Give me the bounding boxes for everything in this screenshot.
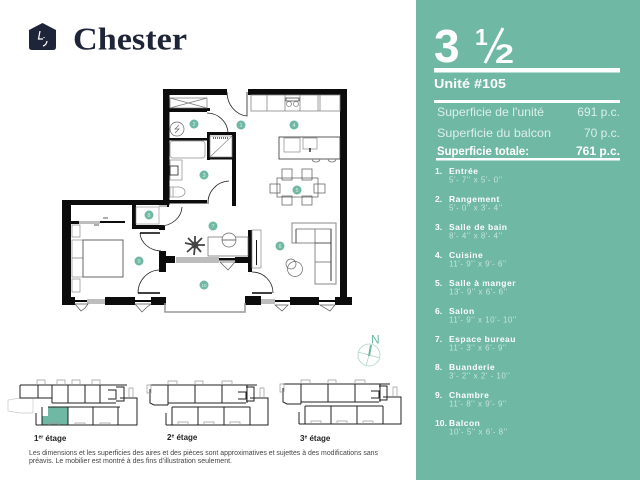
room item 8: 8. <box>435 362 442 372</box>
tall cabinet <box>252 230 261 268</box>
water heater <box>170 122 184 136</box>
room 3: 3 <box>202 173 206 179</box>
room item 8: 3'- 2'' x 2' - 10'' <box>449 372 510 380</box>
coffee tables <box>286 259 302 276</box>
building walls <box>20 385 137 425</box>
room item 8 <box>435 362 510 380</box>
walls <box>62 89 352 305</box>
building walls <box>283 384 401 424</box>
room item 6: Salon <box>449 306 475 316</box>
room item 10 <box>435 418 508 436</box>
room item 3: 8'- 4'' x 8'- 4'' <box>449 232 503 240</box>
room item 6: 6. <box>435 306 442 316</box>
room item 2: 5'- 0'' x 3'- 4'' <box>449 204 503 212</box>
kitchen island <box>279 137 340 162</box>
windows and sliding doors <box>79 205 275 304</box>
bathroom sink <box>170 160 182 180</box>
room item 9: 11'- 8'' x 9'- 9'' <box>449 400 507 408</box>
room item 4: Cuisine <box>449 250 483 260</box>
room item 5 <box>435 278 516 296</box>
room 10 <box>200 280 208 290</box>
room 6 <box>276 242 284 250</box>
storage closet <box>170 98 207 108</box>
room item 7 <box>435 334 516 352</box>
building walls <box>150 385 268 425</box>
room item 3: 3. <box>435 222 442 232</box>
room 9 <box>134 256 144 266</box>
unit type heading <box>434 20 514 72</box>
room 7: 7 <box>211 224 215 230</box>
room 7 <box>208 222 218 230</box>
room item 7: Espace bureau <box>449 334 516 344</box>
room item 4: 4. <box>435 250 442 260</box>
room item 3 <box>435 222 507 240</box>
label: 2nd floor: étage <box>174 433 198 442</box>
room 4 <box>290 120 298 130</box>
unit type heading: 2 <box>495 39 514 69</box>
unit number: Unité #105 <box>434 76 506 91</box>
room item 2: 2. <box>435 194 442 204</box>
doors <box>94 92 273 293</box>
room 6: 6 <box>278 244 282 250</box>
room item 7: 11'- 3'' x 6'- 9'' <box>449 344 507 352</box>
dining table <box>270 169 325 205</box>
label: 3rd floor: 3 <box>300 434 304 443</box>
label: 1st floor: étage <box>43 434 67 443</box>
area table: Superficie du balcon <box>437 126 551 140</box>
area table <box>434 100 620 160</box>
label: 2nd floor: e <box>171 434 174 440</box>
logo <box>29 20 187 56</box>
icon: house <box>29 23 56 50</box>
balconies <box>280 380 397 424</box>
panel: unit details <box>416 0 640 480</box>
room 5: 5 <box>295 188 299 194</box>
room 1: 1 <box>239 123 243 129</box>
room 4: 4 <box>292 123 296 129</box>
area table: 70 p.c. <box>584 126 620 140</box>
desk and chair <box>208 233 248 256</box>
window swing triangles <box>75 262 335 312</box>
room 2 <box>190 120 198 128</box>
room item 9: 9. <box>435 390 442 400</box>
room item 9: Chambre <box>449 390 489 400</box>
room list <box>435 166 517 436</box>
room item 10: 10. <box>435 418 447 428</box>
room item 2 <box>435 194 503 212</box>
room item 5: 13'- 9'' x 6'- 6'' <box>449 288 508 296</box>
key plan: 3rd floor <box>280 380 401 424</box>
room item 5: 5. <box>435 278 442 288</box>
shower <box>210 136 232 157</box>
toilet <box>170 187 185 197</box>
disclaimer note <box>29 450 378 465</box>
room item 6 <box>435 306 517 324</box>
room 9: 9 <box>137 259 141 265</box>
highlighted unit <box>42 407 68 425</box>
disclaimer note: préavis. Le mobilier est montré à des fins d’illustration seulement. <box>29 458 232 465</box>
room 8 <box>144 210 154 220</box>
room item 1: 1. <box>435 166 442 176</box>
room 8: 8 <box>147 213 151 219</box>
balconies <box>147 381 264 425</box>
room 3 <box>200 170 208 180</box>
room item 9 <box>435 390 507 408</box>
kitchen counter <box>251 95 340 111</box>
room item 2: Rangement <box>449 194 500 204</box>
room numbers <box>134 120 302 290</box>
brand name: Chester <box>73 20 187 56</box>
label: 1st floor: 1 <box>34 434 38 443</box>
bathtub <box>170 141 205 158</box>
room item 1: 5'- 7'' x 5'- 0'' <box>449 176 503 184</box>
plant <box>185 236 205 255</box>
floor plan <box>62 89 352 312</box>
disclaimer note: Les dimensions et les superficies des aires et des pièces sont approximatives et sujettes à des modifications sans <box>29 450 378 457</box>
area table: 691 p.c. <box>577 105 620 119</box>
area table: Superficie totale: <box>437 144 529 158</box>
room item 1: Entrée <box>449 166 478 176</box>
label: 2nd floor: 2 <box>167 433 171 442</box>
laundry box <box>136 207 159 224</box>
room item 10: Balcon <box>449 418 480 428</box>
room 5 <box>292 186 302 194</box>
key plan: 2nd floor <box>147 381 268 425</box>
area table: 761 p.c. <box>576 144 620 158</box>
sofa <box>292 223 336 284</box>
label: 3rd floor: étage <box>307 434 331 443</box>
label: 1st floor: er <box>38 434 43 440</box>
bed and nightstands <box>72 225 123 292</box>
room 1 <box>236 120 246 130</box>
room item 6: 11'- 9'' x 10'- 10'' <box>449 316 517 324</box>
room item 7: 7. <box>435 334 442 344</box>
icon: north compass <box>358 332 380 366</box>
balcony outline <box>165 303 245 312</box>
room item 10: 10'- 5'' x 6'- 8'' <box>449 428 508 436</box>
icon: north compass: N <box>371 332 380 346</box>
label: 3rd floor: e <box>304 434 307 440</box>
area table: Superficie de l'unité <box>437 105 544 119</box>
floor labels <box>34 433 331 443</box>
divider <box>434 68 620 72</box>
unit type heading: 1 <box>475 24 488 50</box>
key plan: 1st floor <box>8 380 137 425</box>
room item 8: Buanderie <box>449 362 495 372</box>
room 2: 2 <box>192 122 196 128</box>
balconies <box>37 380 133 425</box>
room item 4: 11'- 9'' x 9'- 6'' <box>449 260 507 268</box>
unit type heading: 3 <box>434 20 460 72</box>
entrance canopy <box>8 398 33 413</box>
room item 1 <box>435 166 503 184</box>
room item 5: Salle à manger <box>449 278 516 288</box>
room item 3: Salle de bain <box>449 222 507 232</box>
room item 4 <box>435 250 507 268</box>
room 10: 10 <box>201 283 207 288</box>
